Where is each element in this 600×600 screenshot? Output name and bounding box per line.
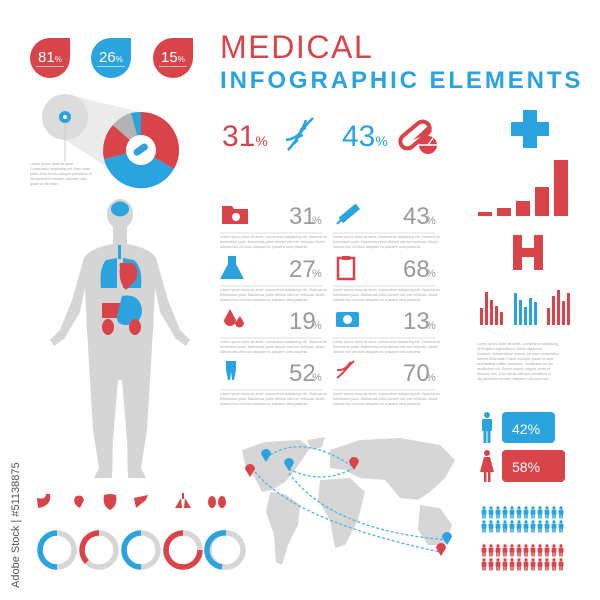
- text block left: dis parturient montes, nascetur ridic: [30, 177, 87, 181]
- stat 43% with pill icon: 43%: [342, 120, 388, 153]
- drop badge 15%: [153, 38, 193, 78]
- row 1 right: syringe 43%: [333, 203, 440, 249]
- organ: liver/stomach/kidneys: [102, 296, 142, 335]
- row 1 right: syringe 43%: %: [426, 215, 436, 227]
- row 2 left: flask 27%: 27: [289, 256, 316, 283]
- icon: blue cross: [511, 110, 549, 148]
- row 4 right: dna 70%: [333, 360, 440, 406]
- male 42%: [482, 412, 555, 443]
- row 1 left: folder 31%: 31: [289, 203, 316, 230]
- world map with routes: [242, 437, 455, 565]
- row 2 right: clipboard 68%: 68: [403, 256, 430, 283]
- bar chart rising: [478, 160, 568, 216]
- title: MEDICAL: [220, 29, 373, 65]
- drop badge 26%: 26%: [99, 49, 123, 66]
- drop badge 26%: [91, 38, 131, 78]
- text block right: [477, 342, 559, 381]
- magnifier pie chart: [42, 94, 179, 188]
- row 4 left: tooth 52%: [220, 360, 327, 406]
- stat 31% with dna icon: [222, 118, 313, 153]
- text block right: rhoncus non. Cum sociis natoque penatibus et: [477, 372, 551, 376]
- male 42%: 42%: [512, 421, 540, 437]
- text block right: laoreet venenatis. Fusce volutpat, ipsum et ante: [477, 357, 553, 361]
- title: INFOGRAPHIC ELEMENTS: [220, 67, 583, 94]
- row 3 right: medkit 13%: [333, 308, 440, 354]
- row 1 right: syringe 43%: 43: [403, 203, 430, 230]
- female 58%: 58%: [512, 459, 540, 475]
- mini bar charts: [480, 290, 570, 325]
- text block right: dis parturient montes, nascetur ridiculus mus.: [477, 377, 549, 381]
- text block left: Consectetur adipiscing elit. Nam vitae: [30, 167, 90, 171]
- female 58%: [480, 450, 565, 482]
- text block right: sed facilisis mattis commodo. Vestibulum eu dui: [477, 362, 553, 366]
- text block left: justo. Cum sociis natoque penatibus et: [29, 172, 92, 176]
- row 4 right: dna 70%: 70: [403, 360, 430, 387]
- row 1 left: folder 31%: [220, 203, 327, 249]
- icon: dna: [286, 118, 313, 150]
- row 3 right: medkit 13%: 13: [403, 308, 430, 335]
- icon: hospital H: [513, 235, 543, 270]
- people grid red: [482, 544, 563, 570]
- text block right: tincidunt. Suspendisse potenti. Aenean consectetur: [477, 352, 559, 356]
- text block left: Lorem ipsum dolor sit amet: [30, 162, 73, 166]
- row 4 right: dna 70%: %: [426, 372, 436, 384]
- drop badge 15%: 15%: [161, 49, 185, 66]
- text block right: vestibulum elit. Donec mauris magna, porta ut: [477, 367, 550, 371]
- row 3 left: blood drops 19%: 19: [289, 308, 316, 335]
- text block left: [29, 162, 92, 186]
- row 4 left: tooth 52%: 52: [289, 360, 316, 387]
- donut charts: [40, 533, 243, 567]
- row 3 left: blood drops 19%: %: [312, 320, 322, 332]
- row 3 left: blood drops 19%: [220, 308, 327, 354]
- text block right: ut fringilla fringilla libero. Etiam dignissim: [477, 347, 542, 351]
- organ: heart: [119, 263, 137, 290]
- drop badge 81%: [30, 38, 70, 78]
- drop badge 81%: 81%: [38, 49, 62, 66]
- row 4 left: tooth 52%: %: [312, 372, 322, 384]
- people grid blue: [482, 506, 563, 532]
- human body: [50, 199, 190, 478]
- credit vertical text: Adobe Stock | #51138875: [10, 462, 22, 588]
- row 2 right: clipboard 68%: [333, 256, 440, 302]
- row 2 left: flask 27%: %: [312, 268, 322, 280]
- row 1 left: folder 31%: %: [312, 215, 322, 227]
- icon: pill: [397, 119, 437, 154]
- row 3 right: medkit 13%: %: [426, 320, 436, 332]
- title: [220, 29, 583, 94]
- organ: brain: [111, 202, 129, 216]
- row 2 right: clipboard 68%: %: [426, 268, 436, 280]
- organ: lungs: [101, 245, 141, 288]
- text block right: Lorem ipsum dolor sit amet, consectetur adipiscing: [477, 342, 558, 346]
- text block left: quam ut elit enim.: [30, 182, 58, 186]
- stat 31% with dna icon: 31%: [222, 120, 268, 153]
- stats grid: [220, 203, 440, 406]
- row 2 left: flask 27%: [220, 256, 327, 302]
- organ icons row: [37, 493, 226, 510]
- stat 43% with pill icon: [342, 119, 437, 154]
